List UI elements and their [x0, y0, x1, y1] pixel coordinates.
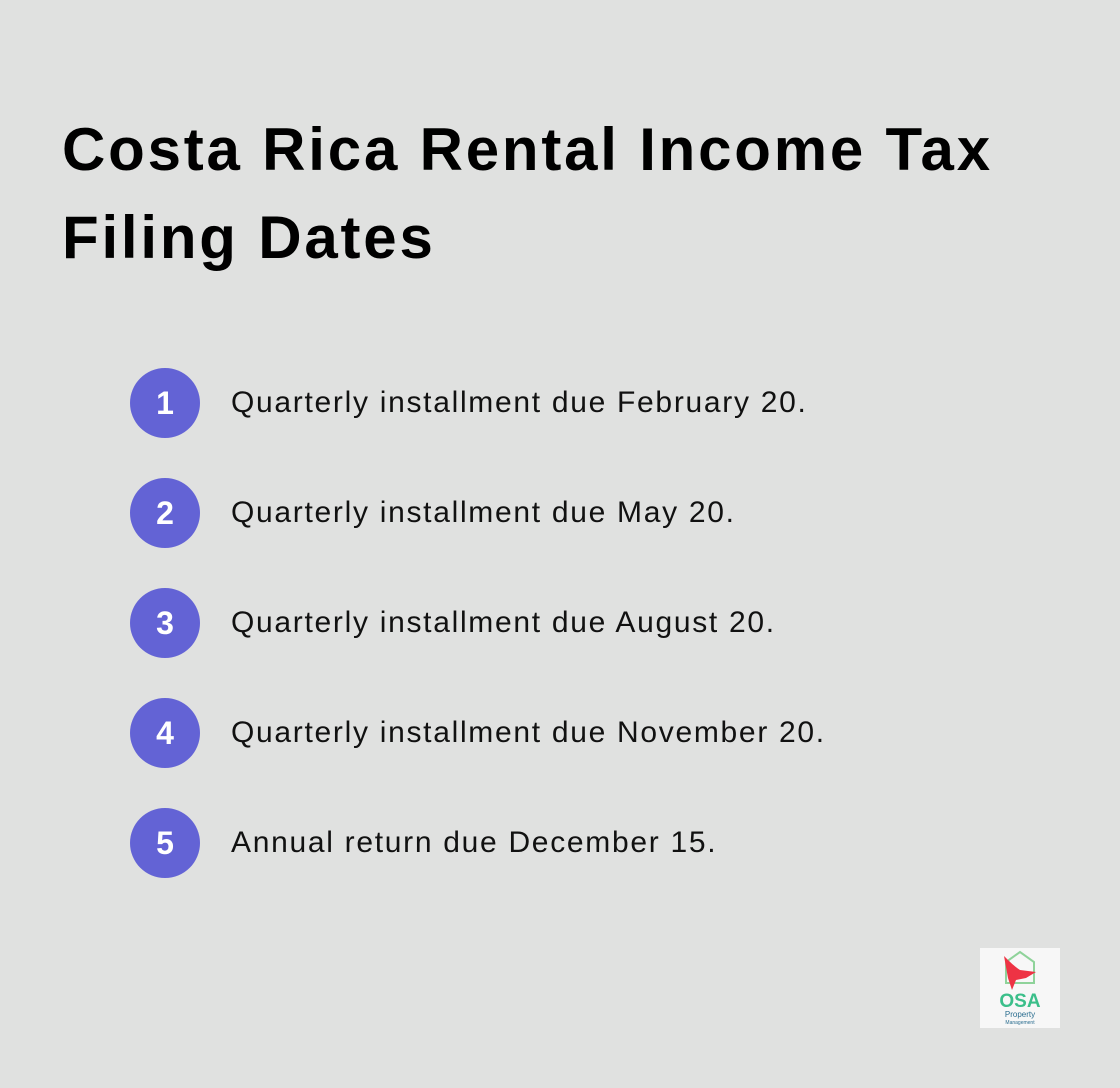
title — [62, 116, 993, 271]
item 1: Quarterly installment due February 20. — [231, 386, 808, 419]
item 2: 2 — [156, 495, 174, 531]
title: Filing Dates — [62, 204, 436, 271]
item 3: 3 — [156, 605, 174, 641]
item 1: 1 — [156, 385, 174, 421]
item 2: Quarterly installment due May 20. — [231, 496, 736, 529]
item 4: Quarterly installment due November 20. — [231, 716, 826, 749]
logo — [980, 948, 1060, 1028]
item 1 — [130, 368, 808, 438]
item 5 — [130, 808, 717, 878]
title: Costa Rica Rental Income Tax — [62, 116, 993, 183]
item 3: Quarterly installment due August 20. — [231, 606, 776, 639]
item 4: 4 — [156, 715, 174, 751]
item 2 — [130, 478, 736, 548]
item 4 — [130, 698, 826, 768]
item 5: 5 — [156, 825, 174, 861]
logo: OSA — [999, 991, 1041, 1012]
item 3 — [130, 588, 776, 658]
logo: Property — [1005, 1010, 1035, 1019]
logo: Management — [1005, 1020, 1035, 1026]
item 5: Annual return due December 15. — [231, 826, 717, 859]
